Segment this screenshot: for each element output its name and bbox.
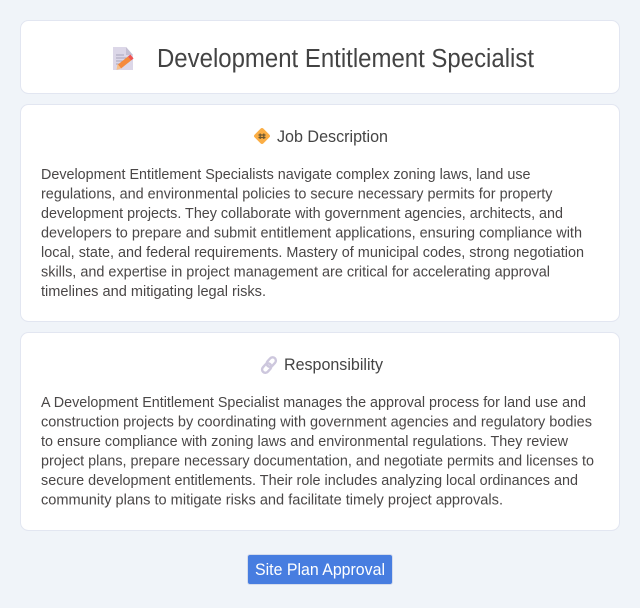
panel: title card — [20, 20, 620, 94]
text block: responsibility: secure development entitlements. Their role includes analyzing local ordinances and — [41, 473, 578, 489]
icon: document with pencil — [113, 47, 133, 70]
heading: job description: Job Description — [277, 128, 388, 146]
text block: responsibility: community plans to mitigate risks and facilitate timely project approvals. — [41, 492, 503, 508]
text block: responsibility — [41, 395, 594, 508]
text block: job description: Development Entitlement Specialists navigate complex zoning laws, land use — [41, 167, 530, 183]
text block: responsibility: construction projects by coordinating with government agencies and regulatory bodies — [41, 414, 592, 430]
heading: responsibility: Responsibility — [284, 356, 384, 374]
text block: responsibility: to ensure compliance with zoning laws and environmental regulations. They review — [41, 434, 569, 450]
panel: job description — [20, 104, 620, 322]
button: site plan approval: Site Plan Approval — [255, 561, 385, 579]
text block: job description: development projects. They collaborate with government agencies, architects, and — [41, 206, 563, 222]
title: Development Entitlement Specialist — [157, 45, 534, 73]
text block: job description: local, state, and federal requirements. Mastery of municipal codes, strong negotiation — [41, 245, 584, 261]
text block: job description: timelines and mitigating legal risks. — [41, 284, 266, 300]
text block: job description — [41, 167, 584, 300]
text block: responsibility: project plans, prepare necessary documentation, and negotiate permits and licenses to — [41, 454, 594, 470]
icon: chain link — [261, 356, 277, 374]
text block: responsibility: A Development Entitlement Specialist manages the approval process for land use and — [41, 395, 586, 411]
text block: job description: regulations, and environmental policies to secure necessary permits for property — [41, 186, 553, 202]
button: site plan approval — [248, 554, 392, 584]
panel: responsibility — [20, 332, 620, 530]
icon: orange diamond sign — [253, 127, 271, 145]
text block: job description: developers to prepare and submit entitlement applications, ensuring compliance with — [41, 226, 582, 242]
text block: job description: skills, and expertise in project management are critical for accelerating approval — [41, 264, 550, 280]
